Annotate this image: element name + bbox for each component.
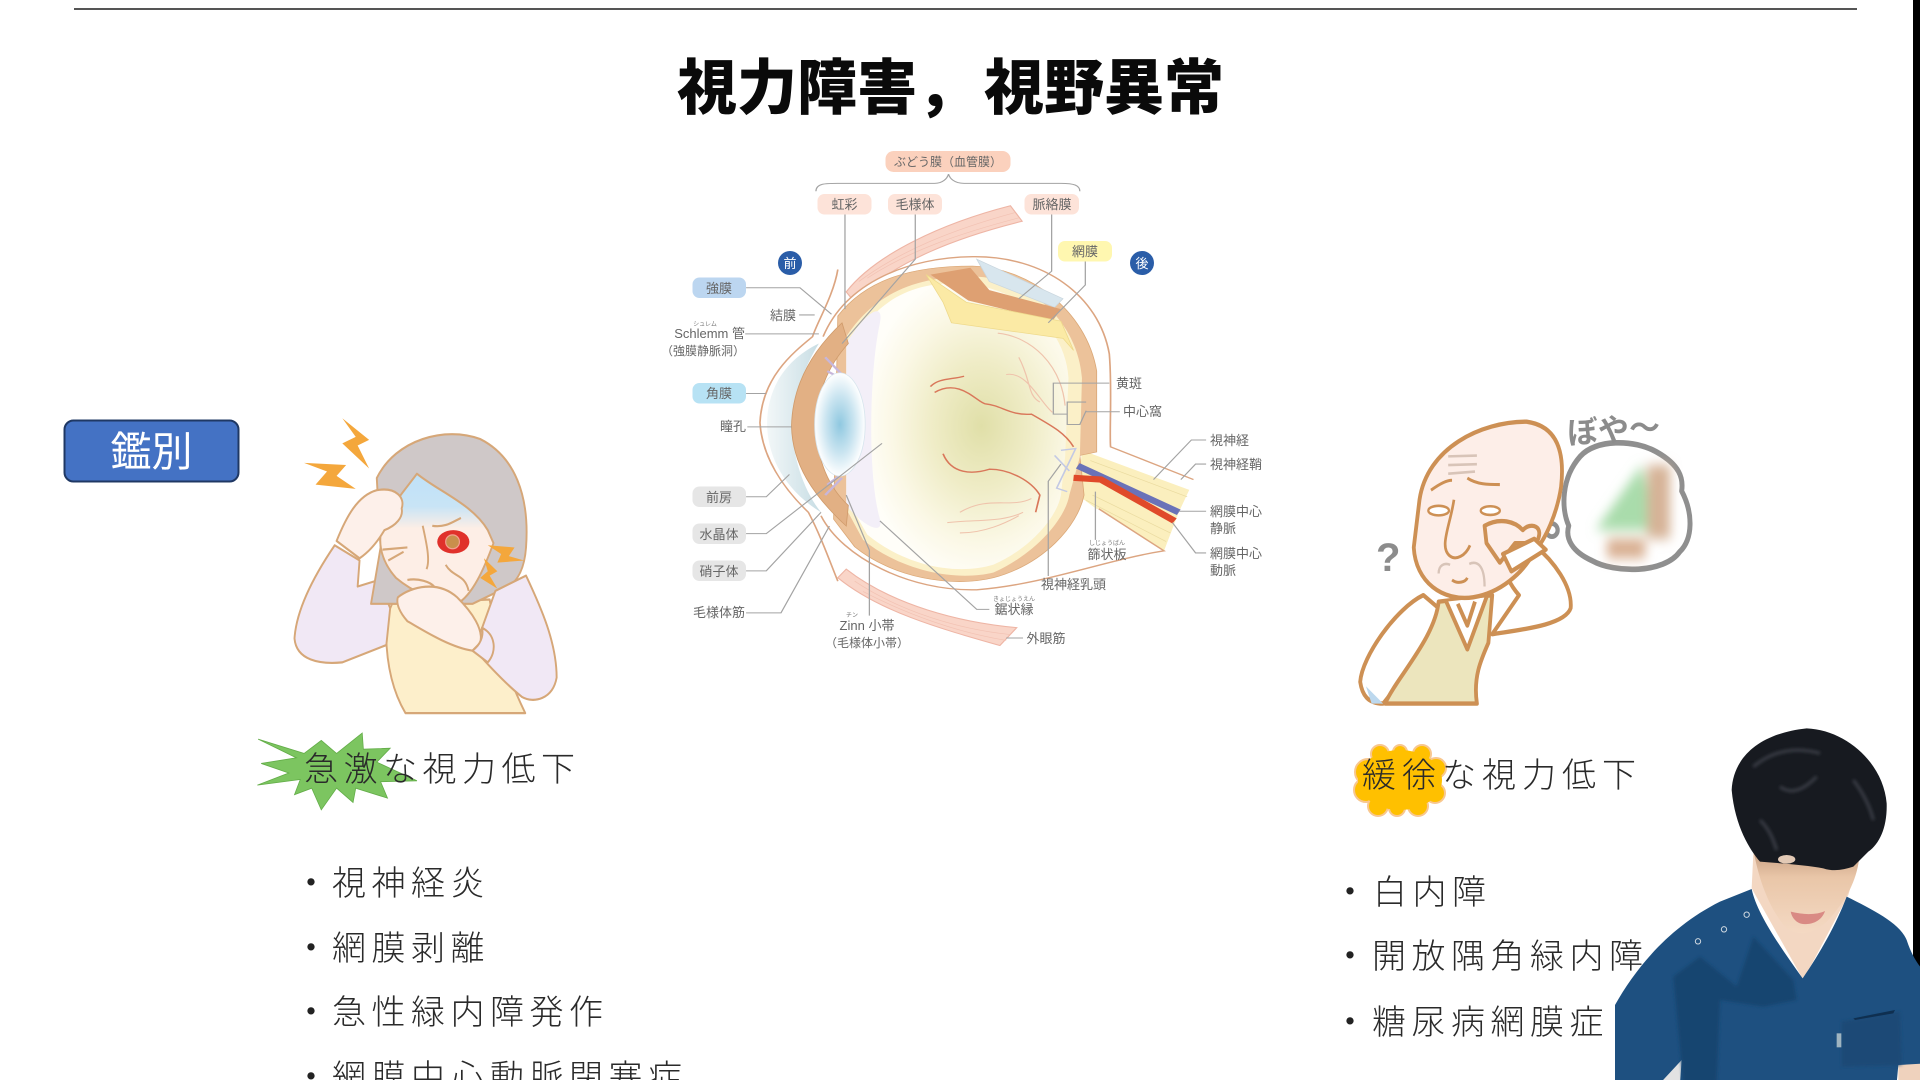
gradual list — [1333, 874, 1648, 1042]
anatomy labels: 網膜 — [1072, 244, 1098, 259]
title: 視力障害， — [677, 55, 977, 122]
anatomy labels: 鋸状縁 — [994, 602, 1034, 617]
acute list: 急性緑内障発作 — [332, 994, 608, 1032]
gradual list: 白内障 — [1373, 874, 1492, 912]
anatomy labels: 強膜 — [706, 281, 732, 296]
label pills — [692, 151, 1154, 581]
anatomy labels: 後 — [1135, 256, 1149, 271]
anatomy labels: （毛様体小帯） — [825, 636, 909, 650]
anatomy labels: チン — [846, 612, 858, 619]
anatomy labels: 中心窩 — [1123, 404, 1162, 419]
anatomy labels: 篩状板 — [1087, 547, 1127, 562]
anatomy labels: 瞳孔 — [720, 419, 746, 434]
anatomy labels: 静脈 — [1210, 521, 1236, 536]
gradual list: ・ — [1333, 938, 1367, 976]
badge: 鑑別 — [64, 420, 238, 482]
anatomy labels: 水晶体 — [699, 527, 739, 542]
top rule — [74, 8, 1857, 10]
eyeball drawing — [760, 206, 1193, 646]
gradual heading: 緩徐な視力低下 — [1362, 757, 1642, 795]
anatomy labels: 虹彩 — [831, 197, 858, 212]
anatomy labels: Schlemm 管 — [674, 326, 745, 341]
anatomy labels: 視神経 — [1210, 433, 1249, 448]
anatomy labels: 角膜 — [706, 386, 732, 401]
acute heading: 急激な視力低下 — [304, 751, 580, 789]
gradual list: 糖尿病網膜症 — [1372, 1004, 1609, 1042]
anatomy labels: 網膜中心 — [1210, 504, 1262, 519]
anatomy labels: 外眼筋 — [1026, 631, 1066, 646]
anatomy labels: ぶどう膜（血管膜） — [894, 154, 1002, 169]
right black edge strip — [1913, 0, 1920, 1080]
gradual list: ・ — [1333, 1004, 1367, 1042]
anatomy labels: シュレム — [693, 321, 717, 328]
anatomy labels: 毛様体筋 — [693, 605, 745, 620]
badge: 鑑別: 鑑別 — [110, 429, 192, 475]
anatomy labels: （強膜静脈洞） — [661, 343, 745, 358]
question mark: ? — [1376, 536, 1400, 580]
title — [677, 55, 1224, 122]
leader lines — [745, 174, 1206, 638]
anatomy labels — [661, 154, 1262, 650]
anatomy labels: 結膜 — [770, 308, 796, 323]
anatomy labels: きょじょうえん — [993, 596, 1035, 603]
acute list: ・ — [294, 930, 328, 968]
orange cloud highlight — [1354, 745, 1446, 816]
anatomy labels: 網膜中心 — [1210, 546, 1262, 561]
eye anatomy diagram — [661, 151, 1262, 650]
anatomy labels: Zinn 小帯 — [840, 618, 894, 633]
thought bubble with blurred tree — [1546, 443, 1690, 569]
acute list: 視神経炎 — [332, 865, 490, 903]
gradual list: ・ — [1333, 874, 1367, 912]
anatomy labels: 毛様体 — [895, 197, 935, 212]
acute list — [294, 865, 688, 1080]
blurry vision caption: ぼや〜 — [1566, 410, 1661, 451]
anatomy labels: 視神経鞘 — [1210, 457, 1262, 472]
anatomy labels: 動脈 — [1210, 563, 1236, 578]
anatomy labels: 黄斑 — [1116, 376, 1142, 391]
anatomy labels: 脈絡膜 — [1032, 197, 1072, 212]
acute list: ・ — [294, 994, 328, 1032]
gradual list: 開放隅角緑内障 — [1372, 938, 1648, 976]
acute column — [257, 733, 688, 1080]
acute list: 網膜剥離 — [332, 930, 490, 968]
anatomy labels: 前房 — [706, 490, 732, 505]
gradual column — [1333, 745, 1648, 1042]
illustration: elderly man with blurred vision — [1360, 422, 1690, 704]
anatomy labels: 硝子体 — [699, 564, 739, 579]
anatomy labels: 前 — [783, 256, 797, 271]
title: 視野異常 — [984, 55, 1224, 122]
illustration: woman with acute eye pain — [294, 418, 557, 713]
starburst — [257, 733, 417, 810]
presenter photo stand-in — [1615, 728, 1920, 1080]
anatomy labels: 視神経乳頭 — [1041, 577, 1106, 592]
acute list: ・ — [294, 865, 328, 903]
anatomy labels: しじょうばん — [1089, 539, 1125, 547]
